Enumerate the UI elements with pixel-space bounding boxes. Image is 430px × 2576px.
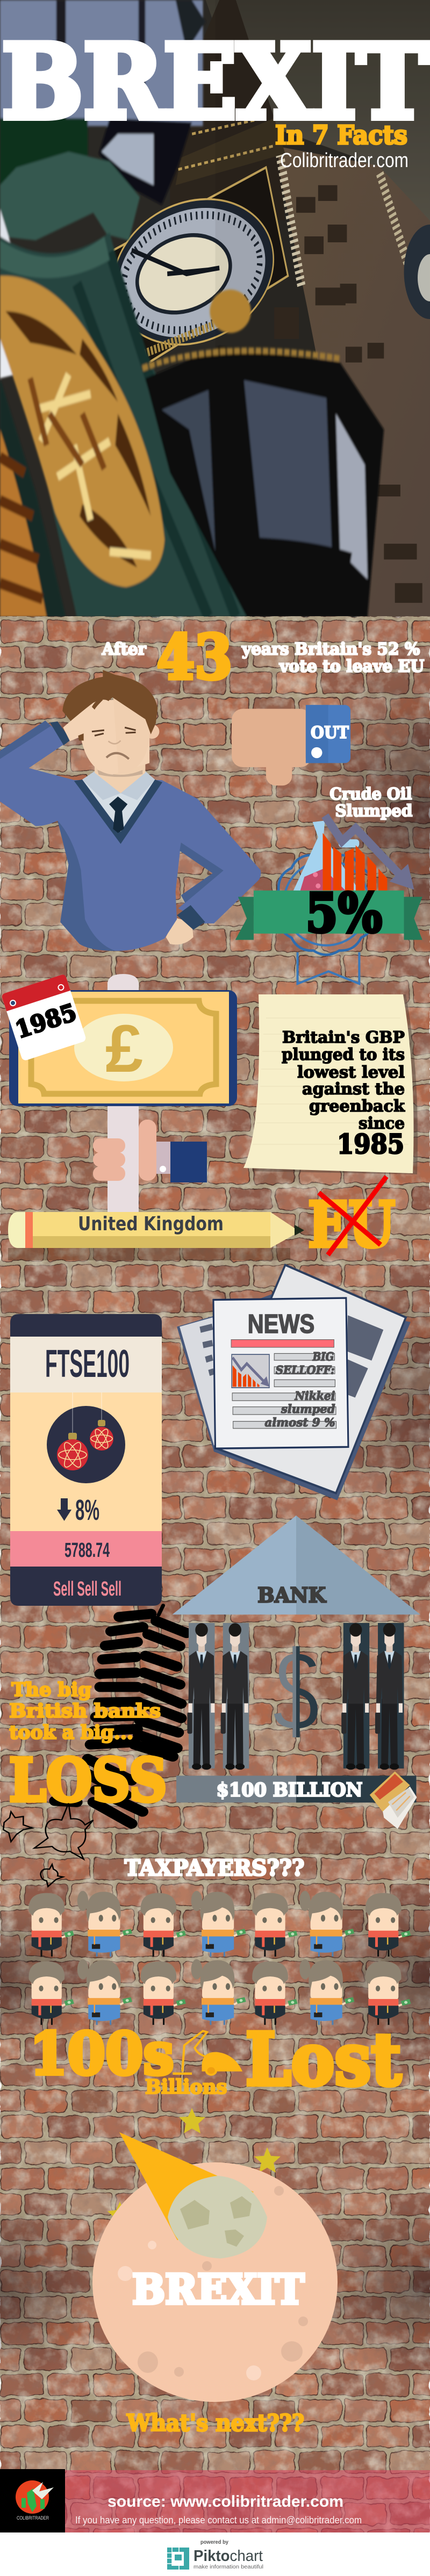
text: LOSS: LOSS (9, 1746, 167, 1815)
text: The big British banks took a big...: took a big... (9, 1721, 133, 1743)
fact 1: 43 years headline: years Britain's 52 % (241, 639, 420, 659)
text: 100s Billions Lost with vacuum icon (30, 2017, 401, 2102)
note paper: GBP lowest level text: against the (302, 1080, 405, 1099)
fact 1: 43 years headline: After (102, 639, 147, 659)
note paper: GBP lowest level text: 1985 (337, 1128, 404, 1160)
note paper: GBP lowest level text: greenback (309, 1097, 405, 1116)
pencil: United Kingdom: United Kingdom (78, 1213, 224, 1235)
illustration: worried man in blue sweater (0, 670, 261, 951)
white footer: powered by Piktochart (0, 2532, 430, 2576)
note paper: GBP lowest level text: since (359, 1114, 405, 1133)
text: Crude Oil Slumped (329, 784, 412, 820)
illustration: newspapers with NEWS front page: Nikkei (294, 1389, 335, 1403)
panel: FTSE100 card: FTSE100 (45, 1343, 130, 1386)
illustration: newspapers with NEWS front page (177, 1265, 411, 1500)
chart badge: crude oil down 5%: 5% (305, 882, 382, 945)
note paper: GBP lowest level text: Britain's GBP (282, 1028, 405, 1047)
hero photo: Big Ben clock tower and lantern (0, 0, 430, 617)
note paper: GBP lowest level text: lowest level (297, 1063, 405, 1082)
text: 100s Billions Lost with vacuum icon: 100s (30, 2020, 174, 2088)
site name Colibritrader.com: Colibritrader.com (280, 149, 408, 172)
pictogram: rows of taxpayers holding money (28, 1891, 411, 2025)
illustration: bank building with bankers: $100 BILLION (217, 1779, 362, 1801)
text: Crude Oil Slumped: Crude Oil (329, 784, 412, 803)
white footer: powered by Piktochart: Piktochart (194, 2548, 263, 2565)
icon: explosions (3, 1803, 93, 1887)
illustration: hand holding pound banknote sign: £ (105, 1012, 143, 1086)
logo: Colibritrader: COLIBRITRADER (17, 2515, 49, 2521)
illustration: firecracker string (55, 1605, 187, 1824)
text: 100s Billions Lost with vacuum icon: Billions (145, 2075, 227, 2098)
brick wall background (0, 616, 430, 2534)
illustration: planet with comet and BREXIT label: BREXIT (132, 2265, 304, 2313)
text: What's next???: What's next??? (126, 2410, 304, 2437)
icon: matchbox (370, 1771, 417, 1829)
text: The big British banks took a big... (9, 1679, 161, 1743)
subtitle In 7 Facts: In 7 Facts (275, 120, 407, 150)
calendar: 1985 (1, 973, 87, 1062)
fact 1: 43 years headline: 43 (157, 622, 232, 693)
illustration: planet with comet and BREXIT label (92, 2132, 338, 2402)
pencil: United Kingdom (8, 1212, 304, 1260)
icon: thumbs down with OUT cuff: OUT (311, 723, 349, 742)
illustration: bank building with bankers: BANK (257, 1583, 327, 1607)
illustration: newspapers with NEWS front page: NEWS (248, 1309, 314, 1339)
panel: FTSE100 card (10, 1314, 162, 1606)
calendar: 1985: 1985 (12, 999, 80, 1044)
panel: FTSE100 card: Sell Sell Sell (53, 1578, 121, 1600)
illustration: newspapers with NEWS front page: slumped (281, 1402, 335, 1416)
illustration: bank building with bankers (172, 1516, 420, 1802)
text: The big British banks took a big...: The big (11, 1679, 91, 1701)
illustration: newspapers with NEWS front page: almost 9 % (264, 1416, 335, 1429)
text: The big British banks took a big...: British banks (9, 1700, 161, 1722)
note paper: GBP lowest level text (243, 994, 418, 1174)
decorative stars (108, 2108, 281, 2227)
white footer: powered by Piktochart: powered by (200, 2539, 228, 2545)
fact 1: 43 years headline: vote to leave EU (279, 657, 425, 676)
footer band: source and contact: If you have any question, please contact us at admin@colibritrader.com (75, 2515, 362, 2526)
illustration: newspapers with NEWS front page: SELLOFF: (276, 1363, 334, 1377)
footer band: source and contact (65, 2470, 430, 2532)
white footer: powered by Piktochart: make information beautiful (194, 2564, 263, 2570)
icon: thumbs down with OUT cuff (232, 705, 350, 785)
chart badge: crude oil down 5% (235, 816, 422, 984)
text: Crude Oil Slumped: Slumped (335, 801, 412, 820)
heading: TAXPAYERS???: TAXPAYERS??? (125, 1856, 304, 1881)
logo: Colibritrader (0, 2469, 65, 2532)
illustration: newspapers with NEWS front page: BIG (312, 1350, 334, 1363)
illustration: hand holding pound banknote sign (9, 974, 237, 1212)
footer band: source and contact: source: www.colibritrader.com (108, 2493, 343, 2510)
crossed-out EU: EU (308, 1189, 395, 1261)
fact 1: 43 years headline (102, 622, 425, 693)
panel: FTSE100 card: 5788.74 (64, 1539, 110, 1562)
panel: FTSE100 card: 8% (75, 1494, 99, 1526)
note paper: GBP lowest level text: plunged to its (282, 1045, 405, 1064)
